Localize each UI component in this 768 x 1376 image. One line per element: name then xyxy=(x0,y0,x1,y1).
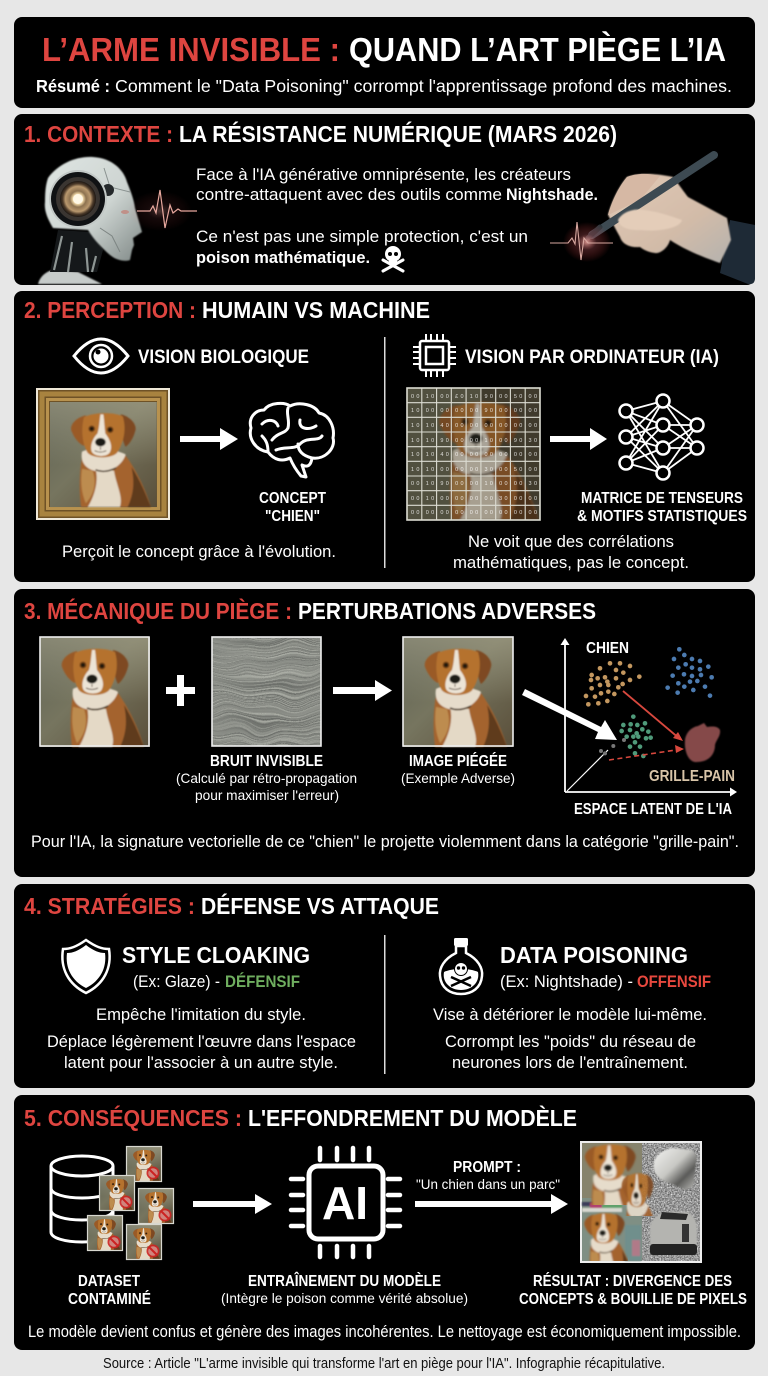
image: poisoned dog xyxy=(403,637,513,747)
arrow: big white xyxy=(522,689,617,740)
matrix: dog tensor grid: 00 10 90 00 00 10 00 00 30 xyxy=(411,481,537,487)
text: context paragraph: Nightshade. xyxy=(506,186,598,204)
arrow xyxy=(180,428,238,450)
cluster: blue dots xyxy=(665,647,714,698)
title: L’ARME INVISIBLE : xyxy=(42,31,340,68)
text: data poisoning: OFFENSIF xyxy=(637,973,711,991)
text: context paragraph: Ce n'est pas une simple protection, c'est un xyxy=(196,228,528,246)
icon: eye xyxy=(74,339,128,373)
text: style cloaking: (Ex: Glaze) - xyxy=(133,973,220,991)
heading: vision biologique: VISION BIOLOGIQUE xyxy=(138,347,309,368)
label: concept chien xyxy=(259,490,326,525)
heading: vision ordinateur: VISION PAR ORDINATEUR (IA) xyxy=(465,347,719,368)
heading: contexte: 1. CONTEXTE : xyxy=(24,121,173,147)
title: QUAND L’ART PIÈGE L’IA xyxy=(349,31,726,68)
label: prompt: PROMPT : xyxy=(453,1159,521,1176)
panel: consequences xyxy=(14,1095,755,1350)
label: dataset: CONTAMINÉ xyxy=(68,1291,151,1308)
label: image piegee: (Exemple Adverse) xyxy=(401,770,515,786)
heading: strategies xyxy=(24,892,439,919)
matrix: dog tensor grid: 10 10 40 00 00 00 00 00 00 xyxy=(411,452,537,458)
toaster blob xyxy=(685,723,720,762)
text: context paragraph: contre-attaquent avec des outils comme xyxy=(196,186,502,204)
heading: contexte: LA RÉSISTANCE NUMÉRIQUE (MARS 2026) xyxy=(179,120,617,147)
arrow: red dashed xyxy=(609,745,684,760)
label: bruit invisible: BRUIT INVISIBLE xyxy=(210,753,323,770)
heading: perception xyxy=(24,297,430,323)
caption: mecanique: Pour l'IA, la signature vectorielle de ce "chien" le projette violemment dans la catégorie "grille-pain". xyxy=(31,833,739,851)
cluster: chien dots xyxy=(584,661,642,707)
illustration: hand with stylus xyxy=(550,155,755,284)
heading: contexte xyxy=(24,120,617,147)
matrix: dog tensor grid: 00 00 00 00 00 00 00 00 00 xyxy=(411,510,537,516)
label: concept chien: CONCEPT xyxy=(259,490,326,507)
header panel xyxy=(14,17,755,108)
text: data poisoning: neurones lors de l'entraînement. xyxy=(452,1054,688,1072)
label: bruit invisible: pour maximiser l'erreur) xyxy=(195,787,339,803)
text: style cloaking: Déplace légèrement l'œuvre dans l'espace xyxy=(47,1033,356,1051)
text: data poisoning: Vise à détériorer le modèle lui-même. xyxy=(433,1006,707,1024)
caption: machine xyxy=(453,533,689,572)
icon: poison flask xyxy=(440,938,482,994)
matrix: dog tensor grid: 10 10 40 00 00 00 00 00 00 xyxy=(411,423,537,429)
caption: biological: Perçoit le concept grâce à l'évolution. xyxy=(62,543,336,561)
label: entrainement: (Intègre le poison comme vérité absolue) xyxy=(221,1290,468,1306)
panel: perception xyxy=(14,291,755,582)
cluster: green dots xyxy=(599,714,653,758)
heading: consequences: L'EFFONDREMENT DU MODÈLE xyxy=(248,1104,577,1131)
label: image piegee xyxy=(401,753,515,786)
arrow xyxy=(333,680,392,701)
image: noise xyxy=(212,637,321,746)
source line: Source : Article "L'arme invisible qui transforme l'art en piège pour l'IA". Infographie récapitulative. xyxy=(103,1356,665,1372)
icon: neural network xyxy=(620,394,704,480)
text: context paragraph: Face à l'IA générative omniprésente, les créateurs xyxy=(196,166,571,184)
chart: latent space xyxy=(522,638,737,818)
divider xyxy=(384,935,386,1074)
illustration: robot head xyxy=(38,157,142,284)
label: matrice: & MOTIFS STATISTIQUES xyxy=(577,508,747,525)
text: style cloaking: latent pour l'associer à un autre style. xyxy=(64,1054,338,1072)
summary: Comment le "Data Poisoning" corrompt l'apprentissage profond des machines. xyxy=(115,76,732,96)
image: original dog xyxy=(40,637,150,747)
caption: machine: Ne voit que des corrélations xyxy=(468,533,674,551)
label: grille-pain: GRILLE-PAIN xyxy=(649,768,735,785)
label: prompt xyxy=(416,1159,560,1192)
text: style cloaking: Empêche l'imitation du style. xyxy=(96,1006,306,1024)
matrix: dog tensor grid: 10 10 90 00 00 10 00 90 30 xyxy=(411,438,537,444)
matrix: dog tensor grid: 00 10 00 00 00 00 30 00 00 xyxy=(411,496,537,502)
heading: consequences: 5. CONSÉQUENCES : xyxy=(24,1104,242,1131)
text: data poisoning: (Ex: Nightshade) - xyxy=(500,973,633,991)
label: matrice: MATRICE DE TENSEURS xyxy=(581,490,743,507)
matrix: dog tensor grid xyxy=(407,388,540,520)
text: style cloaking xyxy=(47,942,356,1072)
label: matrice xyxy=(577,490,747,525)
matrix: dog tensor grid: 10 00 00 00 00 90 00 00 00 xyxy=(411,408,537,414)
arrow xyxy=(415,1194,568,1214)
panel: contexte xyxy=(14,114,755,285)
text: data poisoning: Corrompt les "poids" du réseau de xyxy=(445,1033,696,1051)
label: dataset xyxy=(68,1273,151,1308)
text: style cloaking: STYLE CLOAKING xyxy=(122,942,310,968)
heading: strategies: 4. STRATÉGIES : xyxy=(24,892,195,919)
arrow xyxy=(550,428,607,450)
label: resultat xyxy=(519,1273,747,1308)
label: espace latent: ESPACE LATENT DE L'IA xyxy=(574,801,732,818)
image: corrupted result xyxy=(580,1141,702,1277)
label: dataset: DATASET xyxy=(78,1273,140,1290)
summary: Résumé : xyxy=(36,76,110,96)
plus sign xyxy=(166,675,195,706)
matrix: dog tensor grid: 10 10 00 00 00 30 00 50 00 xyxy=(411,467,537,473)
heading: strategies: DÉFENSE VS ATTAQUE xyxy=(201,892,439,919)
heading: mecanique: PERTURBATIONS ADVERSES xyxy=(298,598,596,624)
label: concept chien: "CHIEN" xyxy=(265,508,320,525)
label: chien: CHIEN xyxy=(586,640,629,657)
label: bruit invisible xyxy=(176,753,357,803)
text: style cloaking: DÉFENSIF xyxy=(225,972,300,991)
icon: brain xyxy=(250,403,333,477)
heading: mecanique xyxy=(24,597,596,624)
heading: consequences xyxy=(24,1104,577,1131)
text: context paragraph: poison mathématique. xyxy=(196,249,370,267)
icon: AI chip: AI xyxy=(322,1177,368,1229)
label: prompt: "Un chien dans un parc" xyxy=(416,1176,560,1192)
divider xyxy=(384,337,386,568)
panel: strategies xyxy=(14,884,755,1088)
arrow: red xyxy=(623,691,683,741)
caption: machine: mathématiques, pas le concept. xyxy=(453,554,689,572)
icon: pulse left xyxy=(128,190,197,231)
matrix: dog tensor grid: 00 10 00 £0 10 90 00 50 00 xyxy=(411,394,537,400)
icon: shield xyxy=(62,940,110,993)
text: context paragraph xyxy=(196,166,598,267)
icon: skull and crossbones xyxy=(383,246,403,271)
heading: mecanique: 3. MÉCANIQUE DU PIÈGE : xyxy=(24,597,292,624)
heading: perception: 2. PERCEPTION : xyxy=(24,297,196,323)
text: data poisoning: DATA POISONING xyxy=(500,942,688,968)
panel: mecanique xyxy=(14,589,755,877)
label: entrainement: ENTRAÎNEMENT DU MODÈLE xyxy=(248,1272,441,1290)
arrow xyxy=(193,1194,272,1214)
label: resultat: RÉSULTAT : DIVERGENCE DES xyxy=(533,1273,732,1290)
label: image piegee: IMAGE PIÉGÉE xyxy=(409,753,507,770)
heading: perception: HUMAIN VS MACHINE xyxy=(202,297,430,323)
title xyxy=(42,31,726,68)
icon: chip xyxy=(413,334,456,377)
label: entrainement xyxy=(221,1272,468,1306)
icon: AI chip xyxy=(291,1148,400,1257)
icon: contaminated database xyxy=(51,1146,174,1260)
label: bruit invisible: (Calculé par rétro-propagation xyxy=(176,770,357,786)
painting: framed dog xyxy=(36,388,170,520)
text: data poisoning xyxy=(433,942,711,1072)
